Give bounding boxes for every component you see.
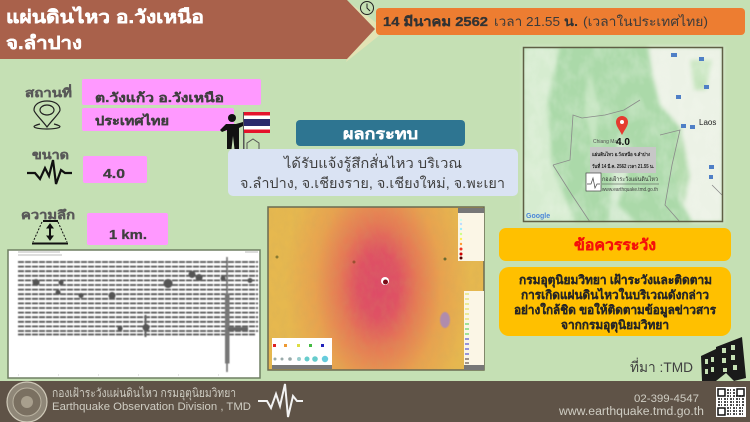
impact text block: จ.ลำปาง, จ.เชียงราย, จ.เชียงใหม่, จ.พะเยา — [240, 175, 505, 191]
icon: damaged buildings — [701, 337, 746, 381]
magnitude section — [27, 148, 147, 184]
map pin — [616, 116, 628, 135]
location heading: สถานที่ — [25, 84, 72, 100]
lake patch — [440, 312, 450, 328]
magnitude heading: ขนาด — [32, 148, 69, 162]
date and time bar: 14 มีนาคม 2562 — [383, 14, 488, 29]
impact heading: ผลกระทบ — [343, 126, 418, 143]
QR code — [716, 387, 746, 417]
epicentre marker — [381, 277, 389, 285]
date and time bar: น. — [564, 14, 578, 29]
caution text block: กรมอุตุนิยมวิทยา เฝ้าระวังและติดตาม — [519, 273, 712, 288]
icon: seismic wave — [27, 160, 72, 184]
location map — [523, 47, 723, 222]
map info card: แผ่นดินไหว อ.วังเหนือ จ.ลำปาง — [592, 151, 650, 158]
impact heading — [296, 120, 465, 146]
footer department name: Earthquake Observation Division , TMD — [52, 401, 251, 413]
map info card — [590, 147, 656, 173]
map info card: วันที่ 14 มี.ค. 2562 เวลา 21.55 น. — [592, 162, 655, 170]
depth heading: ความลึก — [21, 208, 75, 222]
map magnitude label: 4.0 — [616, 137, 630, 148]
footer department name: กองเฝ้าระวังแผ่นดินไหว กรมอุตุนิยมวิทยา — [52, 386, 236, 401]
map logo caption: www.earthquake.tmd.go.th — [602, 187, 658, 193]
location box: subdistrict: ต.วังแก้ว อ.วังเหนือ — [95, 91, 224, 105]
title banner: จ.ลำปาง — [6, 33, 82, 53]
footer contact: 02-399-4547 — [634, 393, 699, 405]
depth and magnitude legend — [272, 338, 332, 369]
seismogram chart — [8, 250, 260, 378]
icon: footer seismic wave — [258, 384, 303, 417]
depth value: 1 km. — [109, 227, 147, 242]
caution text block — [499, 267, 731, 336]
google logo: Google — [526, 213, 550, 220]
title banner: แผ่นดินไหว อ.วังเหนือ — [6, 6, 204, 27]
caution text block: อย่างใกล้ชิด ขอให้ติดตามข้อมูลข่าวสาร — [514, 302, 717, 318]
location box: subdistrict — [82, 79, 261, 105]
caution text block: การเกิดแผ่นดินไหวในบริเวณดังกล่าว — [521, 287, 709, 302]
caution heading — [499, 228, 731, 261]
footer bar — [0, 381, 750, 422]
icon: depth — [32, 221, 68, 244]
map label: Laos: Laos — [699, 118, 716, 127]
location box: country: ประเทศไทย — [95, 113, 169, 128]
footer contact: www.earthquake.tmd.go.th — [558, 406, 704, 418]
location section — [25, 79, 261, 131]
contour legend — [464, 291, 484, 370]
depth value — [87, 213, 168, 245]
footer contact — [558, 393, 704, 418]
impact text block: ได้รับแจ้งรู้สึกสั่นไหว บริเวณ — [283, 154, 462, 172]
impact text block — [228, 149, 518, 196]
location box: country — [82, 108, 234, 131]
magnitude value: 4.0 — [103, 166, 125, 181]
map logo caption: กองเฝ้าระวังแผ่นดินไหว — [602, 175, 658, 183]
icon: location pin — [34, 101, 60, 129]
intensity heat map — [268, 207, 484, 370]
date and time bar: เวลา 21.55 — [494, 14, 560, 29]
date and time bar — [376, 8, 745, 35]
footer logo: department seal — [7, 382, 47, 422]
map logo caption — [586, 173, 659, 193]
highway markers — [671, 53, 714, 179]
caution heading: ข้อควรระวัง — [574, 237, 656, 254]
icon: person with Thai flag — [220, 112, 270, 149]
title banner — [0, 0, 386, 62]
icon: clock — [360, 2, 374, 14]
intensity legend — [458, 208, 484, 261]
footer department name — [52, 386, 251, 413]
caution text block: จากกรมอุตุนิยมวิทยา — [561, 318, 669, 333]
depth section — [21, 208, 168, 245]
date and time bar: (เวลาในประเทศไทย) — [583, 14, 708, 29]
map label: Chiang Mai: Chiang Mai — [593, 139, 618, 145]
source label: ที่มา :TMD — [630, 358, 693, 375]
